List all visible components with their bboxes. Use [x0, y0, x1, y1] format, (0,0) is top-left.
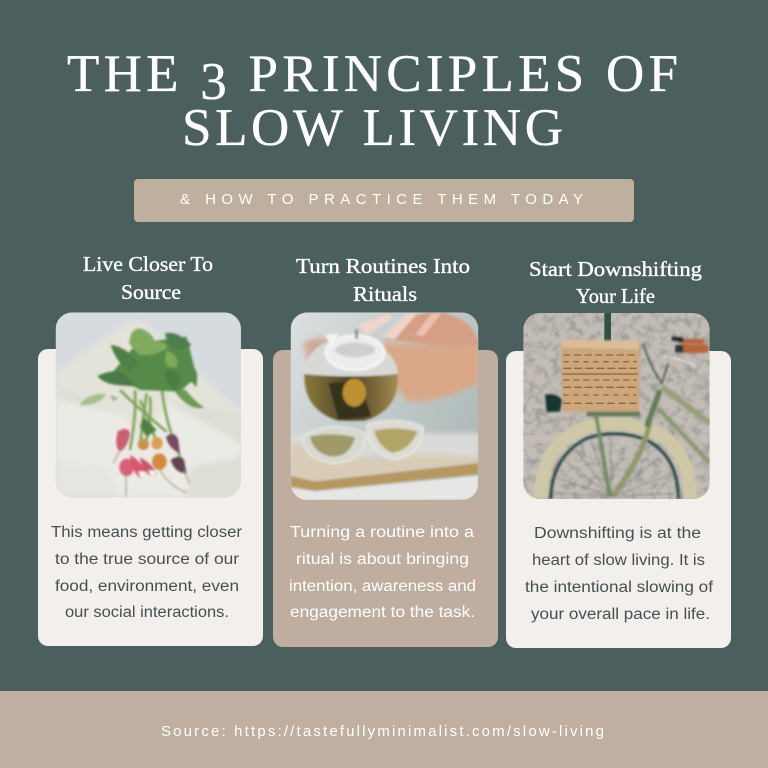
heading: live closer to source	[83, 252, 213, 304]
source footer	[0, 691, 768, 768]
heading: start downshifting your life: Start Downshifting	[529, 257, 703, 281]
heading: turn routines into rituals: Rituals	[353, 282, 417, 306]
body text	[525, 525, 714, 623]
body text: Turning a routine into a	[290, 524, 474, 541]
title: SLOW LIVING	[182, 99, 563, 157]
subtitle banner: & HOW TO PRACTICE THEM TODAY	[180, 191, 583, 208]
body text: intention, awareness and	[289, 578, 476, 595]
panel: turn routines into rituals	[273, 254, 498, 647]
source footer: Source: https://tastefullyminimalist.com/slow-living	[161, 723, 604, 740]
body text: engagement to the task.	[290, 604, 475, 621]
body text: our social interactions.	[65, 604, 229, 621]
card background	[273, 350, 498, 647]
photo: bicycle with basket	[523, 313, 710, 499]
body text	[51, 524, 242, 621]
heading: live closer to source: Source	[121, 280, 181, 304]
card background	[506, 351, 731, 648]
body text: Downshifting is at the	[534, 525, 701, 542]
heading: start downshifting your life: Your Life	[576, 284, 655, 308]
body text: the intentional slowing of	[525, 579, 714, 596]
body text: This means getting closer	[51, 524, 242, 541]
heading: start downshifting your life	[529, 257, 703, 308]
panel: live closer to source	[38, 252, 263, 646]
photo: radishes on linen	[56, 312, 241, 498]
heading: turn routines into rituals	[296, 254, 470, 306]
title	[67, 45, 678, 157]
body text: your overall pace in life.	[531, 606, 710, 623]
card background	[38, 349, 263, 646]
subtitle banner	[134, 179, 634, 222]
title: 3	[200, 53, 227, 111]
body text: food, environment, even	[55, 578, 239, 595]
heading: turn routines into rituals: Turn Routines Into	[296, 254, 470, 278]
body text: to the true source of our	[55, 551, 239, 568]
title: PRINCIPLES OF	[231, 45, 678, 103]
title: THE	[67, 45, 179, 103]
body text	[289, 524, 476, 621]
panel: start downshifting your life	[506, 257, 731, 648]
heading: live closer to source: Live Closer To	[83, 252, 213, 276]
body text: ritual is about bringing	[296, 551, 469, 568]
photo: teapot and cups	[288, 312, 480, 500]
body text: heart of slow living. It is	[532, 552, 705, 569]
